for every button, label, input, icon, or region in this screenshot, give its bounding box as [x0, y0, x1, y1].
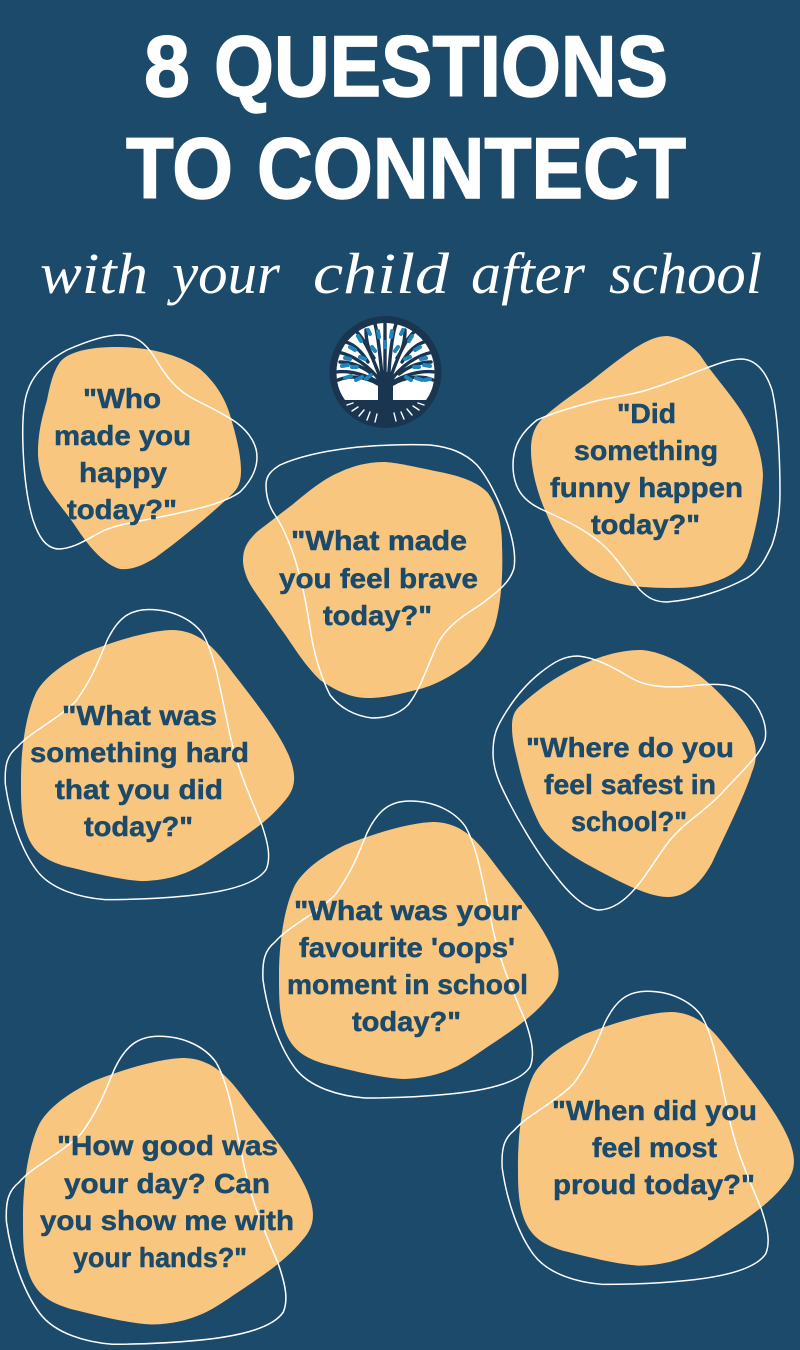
panel: how good was your day: your day? Can: [64, 1168, 270, 1199]
panel: did something funny happen: "Did: [617, 398, 676, 429]
panel: oops moment: favourite 'oops': [299, 932, 515, 963]
panel: how good was your day: [6, 1036, 313, 1344]
panel: feel safest: feel safest in: [544, 769, 716, 800]
title: [126, 19, 686, 217]
panel: something hard: today?": [84, 811, 193, 842]
panel: how good was your day: your hands?": [73, 1242, 247, 1273]
panel: feel safest: school?": [571, 806, 687, 837]
panel: something hard: that you did: [55, 774, 223, 805]
panel: who made you happy: [23, 335, 257, 569]
subtitle: school: [609, 241, 762, 306]
panel: how good was your day: "How good was: [57, 1130, 278, 1161]
panel: who made you happy: "Who: [83, 383, 161, 414]
panel: feel safest: "Where do you: [526, 732, 734, 763]
subtitle: after: [471, 241, 585, 306]
panel: what made you feel brave: [243, 445, 515, 718]
panel: oops moment: moment in school: [287, 969, 528, 1000]
panel: oops moment: [263, 801, 559, 1098]
title: QUESTIONS: [214, 19, 668, 115]
panel: feel safest: [493, 650, 766, 910]
panel: did something funny happen: [513, 336, 780, 602]
panel: how good was your day: you show me with: [40, 1205, 294, 1236]
panel: most proud: "When did you: [552, 1095, 757, 1126]
title: TO: [126, 121, 233, 217]
panel: oops moment: "What was your: [294, 895, 522, 926]
panel: did something funny happen: today?": [591, 509, 700, 540]
panel: something hard: something hard: [30, 737, 249, 768]
panel: something hard: "What was: [62, 700, 217, 731]
panel: did something funny happen: something: [574, 435, 718, 466]
panel: most proud: proud today?": [553, 1169, 755, 1200]
panel: who made you happy: happy: [79, 457, 168, 488]
panel: what made you feel brave: you feel brave: [279, 563, 478, 594]
panel: oops moment: today?": [352, 1006, 461, 1037]
subtitle: [40, 241, 762, 306]
title: CONNTECT: [257, 121, 686, 217]
panel: something hard: [5, 609, 294, 900]
subtitle: with: [40, 241, 148, 306]
panel: most proud: feel most: [592, 1132, 717, 1163]
subtitle: your: [167, 241, 280, 306]
panel: who made you happy: made you: [54, 420, 191, 451]
panel: did something funny happen: funny happen: [550, 472, 743, 503]
panel: what made you feel brave: "What made: [291, 525, 467, 556]
title: 8: [144, 19, 190, 115]
panel: what made you feel brave: today?": [323, 600, 432, 631]
icon: tree of life logo: [330, 316, 442, 428]
panel: who made you happy: today?": [67, 494, 177, 525]
panel: most proud: [502, 991, 794, 1284]
subtitle: child: [313, 241, 450, 306]
